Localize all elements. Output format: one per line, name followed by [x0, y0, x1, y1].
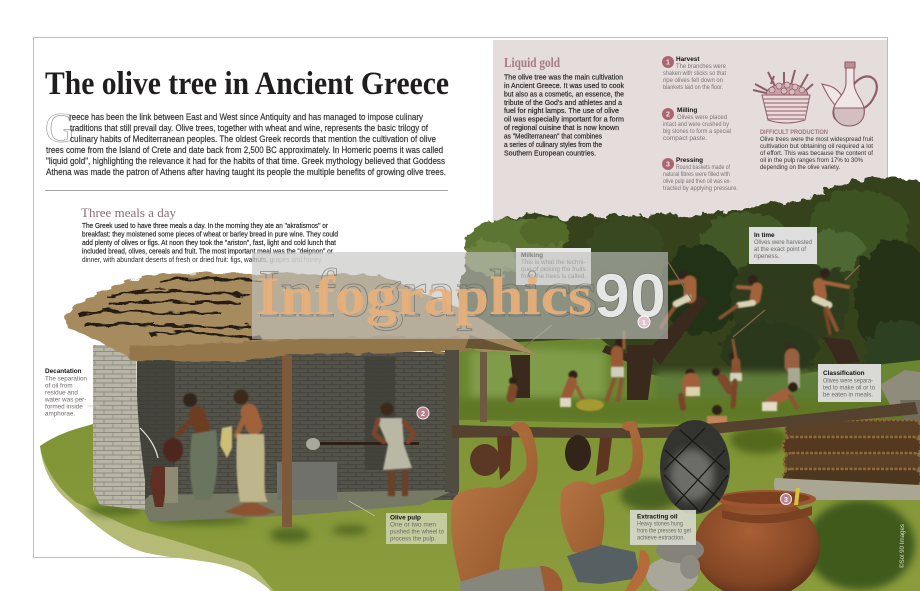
three meals paragraph: The Greek used to have three meals a day. In the morning they ate an "akratismos" or: [82, 221, 328, 230]
hut floor: [140, 490, 455, 522]
step 2: milling: big stones to form a special: [663, 128, 731, 135]
three meals paragraph: breakfast: they moistened some pieces of wheat or barley bread in pure wine. They could: [82, 230, 338, 238]
badge 1: 1: [666, 60, 670, 66]
hut: [64, 273, 540, 527]
liquid gold paragraph: of regional cuisine that is now known: [504, 123, 619, 132]
liquid gold paragraph: a series of culinary styles from the: [504, 140, 602, 149]
icon: olive basket: [753, 70, 813, 123]
step 2: milling: compact paste.: [663, 135, 707, 142]
mill wheel and bar: [306, 438, 419, 450]
callout: classification: [818, 364, 881, 402]
heading: liquid gold: Liquid gold: [504, 56, 560, 71]
basket of olives: [576, 399, 604, 411]
intro text block: [45, 106, 446, 177]
step 2: milling: [662, 107, 731, 142]
liquid gold text: [504, 56, 624, 158]
stone pier: [93, 345, 145, 510]
oil drip: [794, 488, 800, 505]
press plate: [774, 478, 920, 500]
callout: extracting oil: from the presses to get: [637, 528, 691, 534]
credit: ©Sol 90 Images: [899, 524, 906, 568]
intro paragraph: Athena was made the patron of Athens after having taught its people the multiple benefits of growing olive trees.: [46, 166, 446, 177]
callout: olive pulp: pushed the wheel to: [390, 528, 444, 536]
rocks right: [880, 370, 920, 425]
callout: decantation: The separation: [45, 376, 88, 382]
bending worker: [712, 368, 730, 390]
callout: in time: at the exact point of: [754, 246, 806, 253]
worker with raised arm: [607, 332, 625, 400]
poles: [518, 262, 860, 352]
harvesters in the trees: [661, 268, 848, 333]
difficult production note: cultivation but obtaining oil required a lot: [760, 143, 873, 150]
kneeling worker: [681, 368, 700, 408]
callout: extracting oil: achieve extraction.: [637, 534, 685, 542]
badge: step 3 marker: 3: [784, 497, 788, 504]
callout: milking: Milking: [521, 252, 543, 259]
illustration: olive grove and oil press: [40, 177, 920, 591]
intro paragraph: "liquid gold", highlighting the relevance it had for the habits of that time. Greek mythology believed that Goddess: [46, 155, 445, 166]
step 3: pressing: tracted by applying pressure.: [663, 185, 738, 192]
intro paragraph: culinary habits of Mediterranean peoples. The oldest Greek records that mention the cultivation of olive: [70, 133, 436, 144]
callout: decantation: [44, 368, 88, 418]
difficult production note: [760, 129, 873, 171]
step 3: pressing: olive pulp and then oil was ex-: [663, 178, 731, 185]
watermark: 90: [594, 262, 666, 331]
standing worker: [786, 342, 800, 388]
callout: classification: Olives were separa-: [823, 378, 873, 384]
watermark: Infographics: [258, 255, 598, 331]
rocks: [646, 537, 704, 591]
step 2: milling: Milling: [677, 107, 697, 114]
ground base lip: [40, 424, 400, 591]
callout: in time: [749, 227, 817, 264]
step 1: harvest: shaken with sticks so that: [663, 70, 726, 77]
callout: milking: This is what the techni-: [521, 259, 585, 266]
stone net bag: [660, 420, 730, 514]
liquid gold paragraph: but also as a cosmetic, an essence, the: [504, 90, 624, 98]
foreground man 2: [560, 425, 650, 591]
step 1: harvest: [662, 56, 726, 91]
liquid gold paragraph: The olive tree was the main cultivation: [504, 72, 623, 82]
badge 2: 2: [666, 112, 670, 118]
callout: decantation: formed inside: [45, 404, 83, 410]
difficult production note: Olive trees were the most widespread fruit: [760, 136, 873, 143]
difficult production note: DIFFICULT PRODUCTION: [760, 129, 828, 136]
drop cap G: G: [45, 106, 75, 152]
badge: step 1 marker: [638, 316, 650, 328]
callout: milking: que of picking the fruits: [521, 266, 586, 273]
oil stream: [140, 428, 158, 458]
badge 3: 3: [666, 162, 670, 168]
grass shade patches: [87, 426, 915, 590]
man with jug: [220, 390, 276, 516]
title: The olive tree in Ancient Greece: [45, 66, 449, 102]
grass: [40, 420, 920, 591]
harvester left: [661, 270, 690, 327]
millstone vat: [277, 462, 337, 500]
callout: classification: Classification: [823, 370, 865, 377]
callout: extracting oil: Heavy stones hung: [637, 520, 683, 528]
callout: in time: ripeness.: [754, 253, 780, 260]
liquid gold paragraph: oil was especially important for a form: [504, 114, 624, 124]
three meals paragraph: add plenty of olives or figs. At noon they took the "ariston", fast, light and cold lunch that: [82, 238, 336, 247]
callout: olive pulp: One or two men: [390, 522, 436, 528]
three meals paragraph: dinner, with abundant deserts of fresh or dried fruit: figs, walnuts, grapes and honey.: [82, 255, 323, 264]
workers on the ground: [509, 332, 800, 444]
callout: classification: be eaten in meals.: [823, 392, 873, 398]
three meals paragraph: [82, 221, 338, 264]
step 2: milling: Olives were placed: [677, 114, 727, 121]
step 1: harvest: The branches were: [676, 63, 726, 70]
liquid gold paragraph: in Ancient Greece. It was used to cook: [504, 81, 624, 90]
hands: [511, 421, 638, 432]
oil press: [451, 402, 920, 591]
callout: decantation: amphorae.: [45, 410, 75, 418]
crouching worker: [560, 370, 583, 407]
callout: decantation: Decantation: [45, 368, 82, 375]
worker reaching up: [729, 340, 742, 406]
grove ground: [270, 338, 920, 591]
man with tunic: [374, 402, 414, 496]
callout: in time: Olives were harvested: [754, 239, 812, 246]
liquid gold paragraph: Southern European countries.: [504, 148, 596, 158]
worker behind beam: [707, 405, 727, 444]
callout: decantation: residue and: [45, 390, 78, 396]
three meals section: [81, 205, 338, 264]
press beam: [452, 402, 918, 438]
clay pot: [694, 490, 820, 591]
harvester right: [815, 268, 848, 333]
callout: olive pulp: Olive pulp: [390, 514, 421, 522]
heading: three meals a day: Three meals a day: [81, 205, 176, 220]
olive tree trunks: [510, 295, 860, 400]
icon: oil jug: [822, 62, 877, 126]
intro paragraph: traditions that still prevail day. Olive trees, together with wheat and wine, represents the basic trilogy of: [70, 122, 428, 133]
liquid gold paragraph: tribute of the God's and athletes and a: [504, 98, 623, 107]
step 3: pressing: Pressing: [676, 157, 703, 164]
intro paragraph: trees come from the Island of Crete and date back from 2,500 BC approximately. In Homeric poems it was called: [46, 144, 443, 155]
callout: extracting oil: [630, 510, 696, 545]
liquid gold paragraph: [504, 72, 624, 158]
callout: decantation: water was per-: [44, 396, 86, 404]
step 3: pressing: natural fibres were filled with: [663, 171, 730, 178]
press baskets: [783, 420, 920, 488]
badge: step 2 marker: [417, 407, 429, 419]
badge: step 3 marker: [780, 494, 792, 504]
panel: liquid gold background: [493, 40, 887, 240]
step 3: pressing: Round baskets made of: [676, 164, 730, 171]
three meals paragraph: included bread, olives, cereals and fruit. The most important meal was the "deipnon" or: [82, 246, 333, 256]
intro paragraph: [46, 111, 446, 177]
callout: extracting oil: Extracting oil: [637, 514, 678, 520]
liquid gold paragraph: as "Mediterranean" that combines: [504, 132, 602, 140]
posts: [445, 350, 487, 492]
olive trees canopy: [461, 177, 920, 420]
callout: decantation: of oil from: [45, 382, 73, 390]
bent worker: [762, 382, 798, 411]
step 3: pressing: [662, 157, 738, 192]
callout: milking: [516, 248, 591, 285]
callout: milking: from the trees is called.: [521, 273, 586, 280]
step 1: harvest: ripe olives fell down on: [663, 77, 723, 84]
difficult production note: depending on the olive variety.: [760, 164, 840, 171]
watermark: Infographics: [256, 266, 592, 326]
intro paragraph: reece has been the link between East and West since Antiquity and has managed to impose culinary: [69, 111, 423, 122]
thatched roof: [64, 273, 540, 362]
harvester middle: [720, 275, 758, 318]
step 2: milling: intact and were crushed by: [663, 121, 730, 128]
callout: olive pulp: process the pulp.: [390, 536, 436, 542]
amphorae: [150, 466, 178, 507]
liquid gold paragraph: fuel for night lamps. The use of olive: [504, 106, 619, 115]
column: [282, 355, 292, 527]
man decanting: [163, 393, 217, 500]
step 1: harvest: blankets laid on the floor.: [663, 84, 723, 91]
step 1: harvest: Harvest: [676, 56, 700, 63]
foreground man 1: [451, 428, 563, 591]
hut interior: [137, 352, 458, 500]
callout: olive pulp: [386, 513, 447, 544]
badge: step 1 marker: 1: [642, 320, 646, 327]
badge: step 2 marker: 2: [421, 411, 425, 418]
callout: classification: ted to make oil or to: [823, 384, 875, 392]
callout: in time: In time: [754, 232, 775, 239]
difficult production note: of effort. This was because the content of: [760, 150, 873, 157]
difficult production note: oil in the pulp ranges from 17% to 30%: [760, 157, 863, 164]
small worker left: [509, 377, 517, 398]
